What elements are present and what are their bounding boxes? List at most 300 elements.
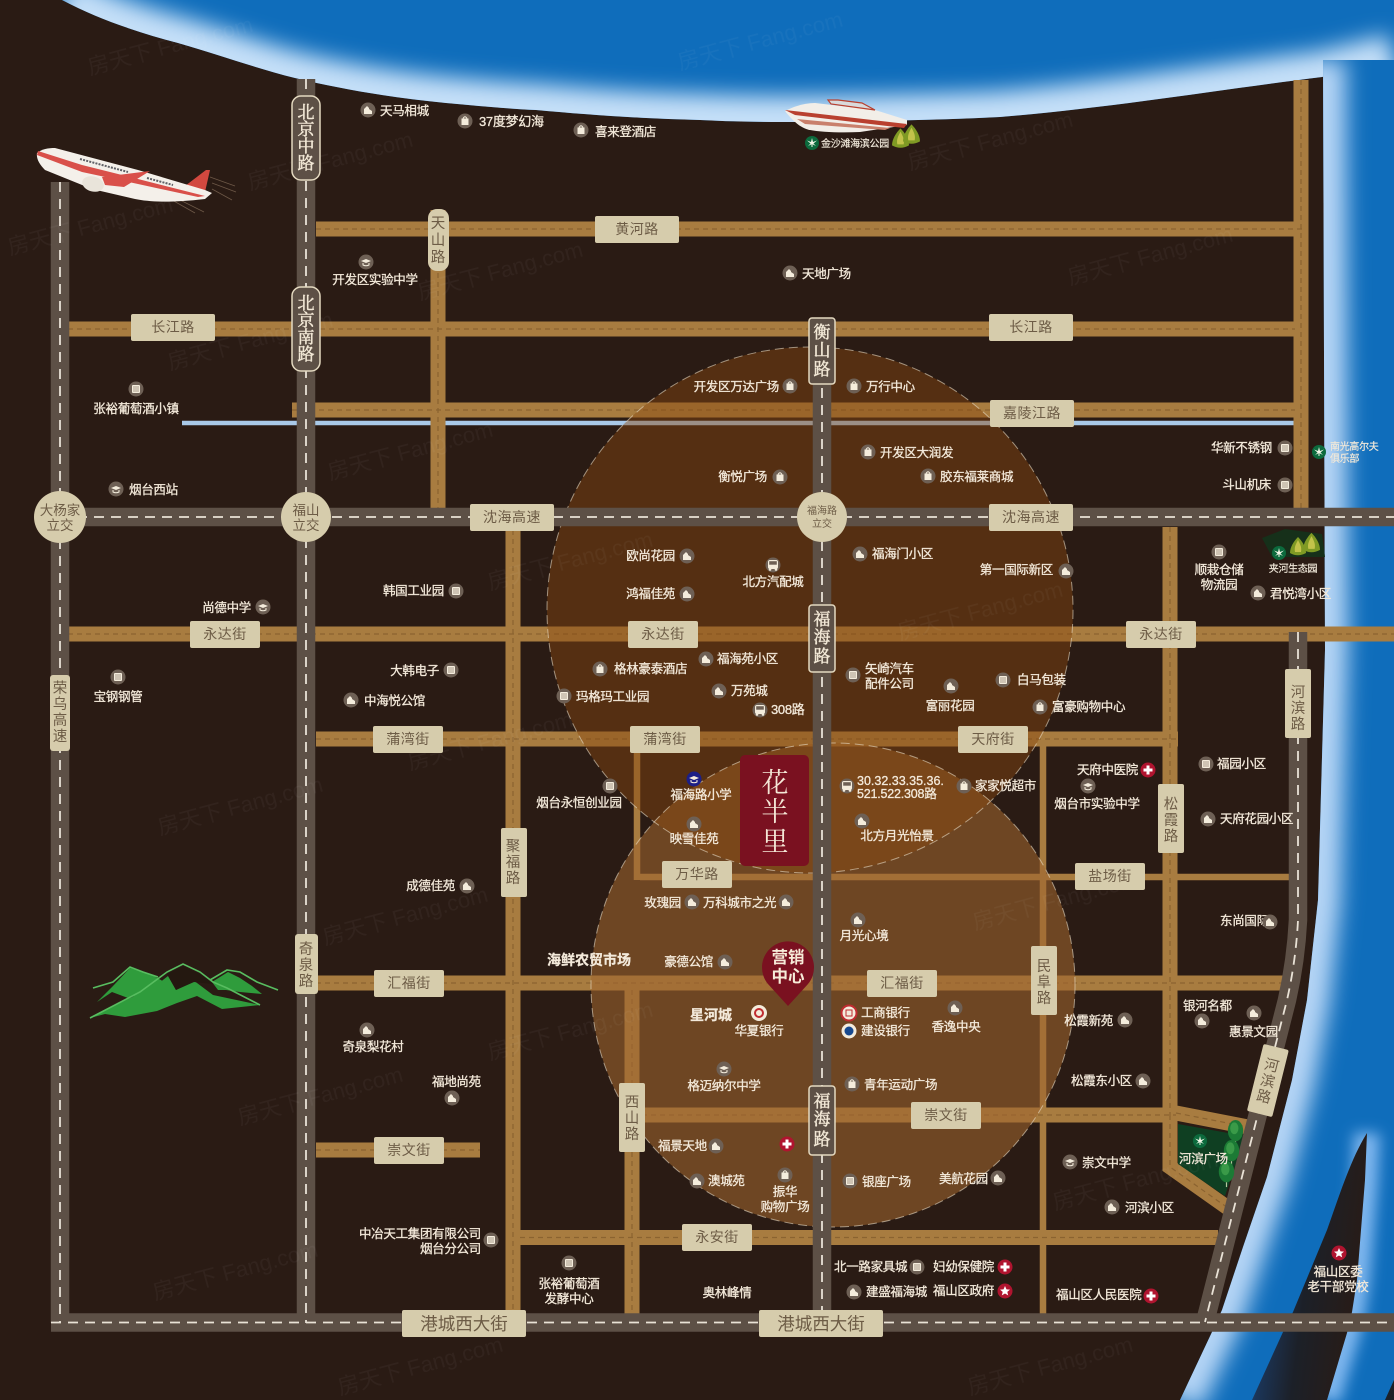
POI: 金沙滩海滨公园: 金沙滩海滨公园: [821, 137, 889, 150]
POI: 中冶天工集团: 中冶天工集团有限公司: [359, 1226, 481, 1241]
POI: 福海门小区: [852, 546, 933, 562]
POI: 天马相城: 天马相城: [380, 104, 430, 118]
road label: 嘉陵江路: [990, 400, 1074, 427]
POI: 天地广场: 天地广场: [802, 267, 851, 281]
road label: 福海路 north: [809, 605, 835, 672]
POI: 福山区人民医院: 福山区人民医院: [1056, 1287, 1142, 1302]
interchange: 福海路立交: 福海路: [807, 504, 837, 517]
POI: 北方汽配城: 北方汽配城: [742, 574, 804, 589]
POI: 开发区实验中学: [332, 254, 418, 287]
POI: 家家悦超市: [956, 778, 1036, 794]
road label: 蒲湾街 center: [630, 726, 700, 753]
road label: 河滨路 north: 路: [1291, 716, 1306, 733]
watermarks: 房天下 Fang.com: [405, 707, 575, 775]
road label: 荣乌高速: 荣: [53, 680, 67, 697]
watermarks: 房天下 Fang.com: [335, 1332, 505, 1400]
road label: 河滨路 north: 滨: [1291, 700, 1305, 717]
POI: 中冶天工集团: 烟台分公司: [420, 1241, 481, 1256]
POI: 河滨广场: [1179, 1134, 1228, 1166]
POI: 月光心境: 月光心境: [840, 928, 888, 943]
POI: 工商银行: 工商银行: [861, 1005, 910, 1020]
POI: 白马包装: 白马包装: [1017, 672, 1066, 687]
road label: 河滨路 south: 滨: [1259, 1071, 1277, 1091]
road label: 嘉陵江路: 嘉陵江路: [1003, 405, 1061, 421]
POI: 富丽花园: [926, 678, 974, 713]
top sea: [62, 0, 1394, 122]
road label: 福海路 north: 福: [814, 610, 830, 629]
POI: 福山区委老干部党校: 福山区委: [1314, 1264, 1363, 1279]
interchange: 福山立交: [281, 492, 331, 542]
POI: 矢崎汽车配件公司: [846, 661, 914, 691]
watermarks: 房天下 Fang.com: [965, 1332, 1135, 1400]
road label: 汇福街 east: 汇福街: [880, 975, 924, 991]
road label: 聚福路: 福: [506, 854, 520, 871]
road label: 北京南路: [292, 287, 320, 371]
road label: 福海路 south: 海: [814, 1110, 830, 1129]
road label: 长江路 east: 长江路: [1009, 319, 1053, 335]
POI: 福园小区: [1198, 756, 1266, 772]
POI: 医院 red cross: [780, 1136, 794, 1152]
sales center pin: [762, 941, 814, 1006]
POI: 烟台西站: 烟台西站: [129, 482, 178, 497]
road label: 永达街 east: 永达街: [1139, 626, 1183, 642]
project marker: 花半里: [740, 755, 809, 866]
interchange: 福山立交: 福山: [292, 503, 320, 518]
POI: 北方月光怡景: [854, 814, 934, 843]
icon: trees at riverside plaza: [1219, 1120, 1243, 1187]
project marker: 花半里: 半: [762, 797, 788, 827]
road label: 西山路: 山: [625, 1110, 639, 1127]
road label: 民阜路: 路: [1037, 990, 1052, 1007]
road label: 松霞路: 霞: [1164, 812, 1178, 829]
POI: 烟台市实验中学: [1054, 778, 1140, 811]
POI: 松霞新苑: 松霞新苑: [1064, 1013, 1114, 1028]
canal: [182, 421, 1295, 425]
POI: 张裕葡萄酒发酵中心: 张裕葡萄酒: [538, 1276, 600, 1291]
road label: 永达街 east: [1126, 621, 1196, 648]
watermarks: 房天下 Fang.com: [485, 527, 655, 595]
road label: 荣乌高速: 乌: [53, 696, 67, 713]
POI: 玫瑰园: 玫瑰园: [644, 895, 681, 910]
POI: 华新不锈钢: 华新不锈钢: [1211, 440, 1272, 455]
road label: 聚福路: 路: [506, 870, 521, 887]
watermarks: 房天下 Fang.com: [5, 192, 175, 260]
road label: 北京南路: 路: [298, 345, 314, 364]
interchange: 大杨家立交: [34, 491, 86, 543]
POI: 中冶天工集团: [359, 1226, 498, 1256]
POI: 华夏银行: [735, 1005, 783, 1038]
POI: 第一国际新区: 第一国际新区: [980, 562, 1053, 577]
road label: 福海路 south: 路: [814, 1130, 830, 1149]
POI: 37度梦幻海: 37度梦幻海: [479, 114, 544, 129]
road label: 永安街: [682, 1224, 752, 1251]
POI: 君悦湾小区: 君悦湾小区: [1270, 586, 1331, 601]
road label: 崇文街 east: 崇文街: [924, 1107, 968, 1123]
road label: 民阜路: 民: [1037, 959, 1051, 975]
road label: 奇泉路: 奇: [299, 941, 313, 958]
road label: 天府街: 天府街: [971, 731, 1015, 747]
POI: 308路: 308路: [771, 702, 805, 717]
road label: 长江路 west: [131, 314, 215, 341]
POI: 宝钢钢管: 宝钢钢管: [94, 689, 142, 704]
POI: 惠景文园: 惠景文园: [1229, 1024, 1278, 1039]
road label: 北京中路: [292, 96, 320, 180]
icon: trees at ecological park: [1262, 529, 1325, 557]
POI: 张裕葡萄酒发酵中心: 发酵中心: [545, 1291, 594, 1306]
river on the right: [1180, 60, 1394, 1400]
POI: 烟台永恒创业园: [536, 778, 622, 810]
POI: 尚德中学: 尚德中学: [202, 600, 251, 615]
POI: 福海苑小区: [698, 651, 778, 666]
road label: 沈海高速 east: [989, 504, 1073, 531]
POI: 南光高尔夫俱乐部: 俱乐部: [1330, 452, 1359, 465]
interchange: 大杨家立交: 大杨家: [40, 502, 81, 518]
POI: 成德佳苑: 成德佳苑: [406, 878, 456, 893]
POI: 振华购物广场: 振华: [773, 1184, 797, 1199]
POI: 银座广场: [842, 1174, 911, 1189]
POI: 松霞东小区: 松霞东小区: [1071, 1074, 1132, 1088]
road label: 福海路 south: [809, 1086, 835, 1155]
road label: 天山路: [428, 209, 449, 271]
POI: 北方月光怡景: 北方月光怡景: [860, 828, 934, 843]
POI: 建盛福海城: 建盛福海城: [866, 1284, 928, 1299]
road label: 聚福路: 聚: [506, 839, 521, 855]
road label: 松霞路: 松: [1164, 796, 1178, 813]
road label: 衡山路: 衡: [814, 323, 830, 342]
road label: 黄河路: 黄河路: [615, 221, 659, 237]
POI: 香逸中央: [932, 1000, 981, 1034]
POI: 福景天地: [658, 1138, 724, 1154]
POI: 第一国际新区: [980, 562, 1074, 578]
POI: 鸿福佳苑: [626, 586, 694, 602]
POI: 福山区政府: 福山区政府: [933, 1283, 994, 1298]
POI: 开发区实验中学: 开发区实验中学: [332, 272, 418, 287]
road label: 北京南路: 北: [298, 294, 314, 313]
POI: 福景天地: 福景天地: [658, 1138, 708, 1153]
watermarks: 房天下 Fang.com: [325, 417, 495, 485]
POI: 天地广场: [782, 266, 851, 281]
interchange: 福海路立交: 立交: [812, 517, 832, 530]
road label: 港城西大街 west: [402, 1310, 526, 1337]
POI: 银河名都: 银河名都: [1183, 998, 1233, 1013]
road label: 西山路: 路: [625, 1126, 640, 1143]
POI: 烟台西站: [108, 482, 178, 497]
road label: 汇福街 west: 汇福街: [387, 975, 431, 991]
road label: 北京中路: 北: [298, 103, 314, 122]
POI: 张裕葡萄酒小镇: 张裕葡萄酒小镇: [93, 401, 179, 416]
road label: 沈海高速 east: 沈海高速: [1002, 509, 1060, 525]
road label: 荣乌高速: 速: [53, 728, 67, 745]
POI: 公交线路: [840, 774, 944, 801]
POI: 顺栽仓储物流园: 顺栽仓储: [1195, 562, 1243, 577]
POI: 北一路家具城: 北一路家具城: [834, 1259, 908, 1274]
POI: 月光心境: [840, 912, 888, 943]
POI: 金沙滩海滨公园: [805, 136, 889, 150]
POI: 华夏银行: 华夏银行: [735, 1023, 783, 1038]
road label: 奇泉路: [295, 934, 318, 994]
road label: 奇泉路: 泉: [299, 957, 314, 974]
POI: 万苑城: 万苑城: [731, 684, 768, 698]
POI: 美航花园: 美航花园: [939, 1171, 988, 1186]
POI: 映雪佳苑: 映雪佳苑: [670, 832, 719, 846]
POI: 万苑城: [712, 684, 768, 698]
road label: 衡山路: 山: [814, 341, 830, 360]
road label: 民阜路: [1031, 946, 1057, 1015]
POI: 振华购物广场: 购物广场: [761, 1199, 809, 1214]
POI: 成德佳苑: [406, 878, 474, 894]
road label: 永达街 west: 永达街: [203, 626, 247, 642]
POI: 308路: [752, 702, 805, 718]
POI: 喜来登酒店: 喜来登酒店: [595, 124, 656, 139]
POI: 万科城市之光: 万科城市之光: [703, 895, 776, 910]
road label: 沈海高速 west: 沈海高速: [483, 509, 541, 525]
POI: 格迈纳尔中学: [687, 1062, 761, 1093]
road label: 西山路: 西: [625, 1095, 639, 1111]
POI: 东尚国际: 东尚国际: [1220, 914, 1269, 928]
POI: 韩国工业园: [383, 583, 464, 598]
POI: 欧尚花园: 欧尚花园: [626, 548, 675, 563]
road label: 蒲湾街 center: 蒲湾街: [643, 731, 687, 747]
icon: trees at beach park: [892, 124, 920, 148]
road label: 永达街 center: 永达街: [641, 626, 685, 642]
POI: 宝钢钢管: [94, 670, 142, 704]
POI: 鸿福佳苑: 鸿福佳苑: [626, 586, 676, 601]
POI: 格林豪泰酒店: [592, 661, 687, 676]
POI: 喜来登酒店: [574, 122, 656, 139]
POI: 欧尚花园: [626, 548, 694, 564]
road label: 长江路 west: 长江路: [151, 319, 195, 335]
road label: 天山路: 路: [431, 249, 446, 266]
POI: 福山区政府: [933, 1283, 1012, 1298]
POI: 夹河生态园: 夹河生态园: [1269, 562, 1318, 575]
watermarks: 房天下 Fang.com: [905, 107, 1075, 175]
watermarks: 房天下 Fang.com: [150, 1237, 320, 1305]
road label: 港城西大街 east: [759, 1310, 883, 1337]
POI: 格迈纳尔中学: 格迈纳尔中学: [687, 1078, 761, 1093]
POI: 君悦湾小区: [1250, 586, 1331, 601]
POI: 万行中心: [846, 378, 916, 394]
road label: 衡山路: [809, 318, 835, 384]
road label: 港城西大街 east: 港城西大街: [777, 1314, 865, 1334]
POI: 天马相城: [360, 102, 430, 118]
road label: 永达街 center: [628, 621, 698, 648]
POI: 张裕葡萄酒小镇: [93, 382, 179, 416]
POI: 建设银行: [842, 1023, 910, 1038]
road label: 聚福路: [501, 828, 527, 897]
POI: 福地尚苑: [432, 1074, 482, 1106]
icon: mountains: [90, 964, 278, 1018]
sales center pin: 营销: [772, 948, 804, 967]
road label: 蒲湾街 west: [373, 726, 443, 753]
sales center pin: 中心: [772, 967, 805, 986]
watermarks: 房天下 Fang.com: [320, 882, 490, 950]
POI: 振华购物广场: [761, 1168, 809, 1214]
POI: 公交线路: 521.522.308路: [857, 786, 937, 801]
POI: 福海门小区: 福海门小区: [872, 546, 933, 561]
interchange: 大杨家立交: 立交: [46, 517, 74, 533]
POI: 尚德中学: [202, 600, 270, 615]
POI: 格林豪泰酒店: 格林豪泰酒店: [614, 661, 687, 676]
road label: 盐场街: 盐场街: [1088, 868, 1132, 884]
road label: 西山路: [619, 1083, 645, 1152]
POI: 斗山机床: 斗山机床: [1222, 478, 1272, 492]
watermarks: 房天下 Fang.com: [485, 997, 655, 1065]
interchange: 福山立交: 立交: [292, 517, 320, 533]
watermarks: 房天下 Fang.com: [1050, 1147, 1220, 1215]
road label: 港城西大街 west: 港城西大街: [420, 1314, 508, 1334]
road label: 河滨路 south: 路: [1255, 1087, 1273, 1107]
watermarks: 房天下 Fang.com: [415, 237, 585, 305]
icon: airplane: [37, 148, 236, 213]
service radius circles: [547, 347, 1075, 1227]
road label: 衡山路: 路: [814, 360, 830, 379]
POI: 香逸中央: 香逸中央: [932, 1019, 981, 1034]
project marker: 花半里: 里: [762, 827, 788, 857]
POI: 开发区万达广场: 开发区万达广场: [694, 379, 779, 394]
POI: 豪德公馆: [664, 954, 732, 970]
road label: 北京中路: 中: [298, 137, 314, 156]
POI: 天府花园小区: 天府花园小区: [1220, 811, 1293, 826]
POI: 妇幼保健院: 妇幼保健院: [933, 1260, 995, 1274]
POI: 矢崎汽车配件公司: 配件公司: [865, 677, 914, 691]
POI: 工商银行: [842, 1005, 910, 1020]
POI: 建设银行: 建设银行: [861, 1023, 910, 1038]
road label: 天山路: 天: [431, 216, 445, 232]
POI: 家家悦超市: 家家悦超市: [975, 778, 1036, 793]
POI: 烟台市实验中学: 烟台市实验中学: [1054, 796, 1140, 811]
road label: 黄河路: [595, 216, 679, 243]
POI: 福山区委老干部党校: 老干部党校: [1307, 1279, 1369, 1294]
POI: 崇文中学: 崇文中学: [1082, 1155, 1131, 1170]
POI: 青年运动广场: 青年运动广场: [864, 1078, 937, 1092]
POI: 福山区委老干部党校: [1307, 1246, 1369, 1294]
POI: 河滨广场: 河滨广场: [1179, 1151, 1228, 1166]
road label: 河滨路 south: [1247, 1044, 1289, 1117]
POI: 衡悦广场: [718, 470, 788, 484]
road label: 民阜路: 阜: [1037, 974, 1051, 991]
road label: 松霞路: [1158, 784, 1184, 853]
road label: 北京中路: 路: [298, 154, 314, 173]
POI: 斗山机床: [1222, 478, 1292, 492]
POI: 夹河生态园: [1269, 546, 1318, 575]
POI: 银座广场: 银座广场: [862, 1174, 911, 1189]
road label: 盐场街: [1075, 863, 1145, 890]
POI: 奇泉梨花村: 奇泉梨花村: [342, 1039, 404, 1054]
POI: 福海苑小区: 福海苑小区: [717, 651, 778, 666]
icon: speedboat: [785, 100, 907, 132]
POI: 豪德公馆: 豪德公馆: [664, 954, 713, 969]
interchange: 福海路立交: [797, 492, 847, 542]
road label: 河滨路 north: 河: [1291, 684, 1305, 701]
road label: 北京南路: 南: [298, 328, 314, 347]
POI: 惠景文园: [1229, 1006, 1278, 1039]
POI: 中海悦公馆: 中海悦公馆: [364, 693, 425, 708]
POI: 韩国工业园: 韩国工业园: [383, 583, 444, 598]
POI: 白马包装: [996, 672, 1066, 688]
road label: 河滨路 south: 河: [1262, 1056, 1281, 1076]
POI: 开发区大润发: 开发区大润发: [880, 445, 954, 460]
road label: 崇文街 west: [374, 1137, 444, 1164]
POI: 大韩电子: [390, 662, 458, 678]
POI: 万行中心: 万行中心: [866, 379, 916, 394]
POI: 美航花园: [939, 1170, 1006, 1186]
POI: 富丽花园: 富丽花园: [926, 698, 974, 713]
road label: 北京中路: 京: [298, 120, 314, 139]
POI: 中海悦公馆: [344, 692, 425, 708]
POI: 顺栽仓储物流园: [1195, 544, 1243, 592]
POI: 南光高尔夫俱乐部: [1312, 440, 1379, 465]
watermarks: 房天下 Fang.com: [85, 12, 255, 80]
road label: 天府街: [958, 726, 1028, 753]
watermarks: 房天下 Fang.com: [245, 127, 415, 195]
POI: 衡悦广场: 衡悦广场: [718, 470, 767, 484]
road label: 万华路: [662, 861, 732, 888]
POI: 烟台永恒创业园: 烟台永恒创业园: [536, 795, 622, 810]
road label: 永安街: 永安街: [695, 1229, 739, 1245]
POI: 华新不锈钢: [1211, 440, 1292, 456]
POI: 福海路小学: [670, 772, 732, 802]
POI: 奇泉梨花村: [342, 1022, 404, 1054]
watermarks: 房天下 Fang.com: [1065, 222, 1235, 290]
POI: 南光高尔夫俱乐部: 南光高尔夫: [1330, 440, 1379, 453]
road label: 河滨路 north: [1285, 669, 1311, 738]
POI: 松霞新苑: [1064, 1012, 1132, 1028]
POI: 映雪佳苑: [670, 816, 719, 846]
POI: 公交线路: 30.32.33.35.36.: [857, 774, 944, 788]
road label: 天山路: 山: [431, 232, 445, 249]
road label: 汇福街 west: [374, 970, 444, 997]
POI: 顺栽仓储物流园: 物流园: [1201, 578, 1237, 592]
POI: 大韩电子: 大韩电子: [390, 663, 439, 678]
road label: 万华路: 万华路: [675, 866, 719, 882]
watermarks: 房天下 Fang.com: [155, 772, 325, 840]
road label: 北京南路: 京: [298, 311, 314, 330]
road label: 福海路 north: 海: [814, 628, 830, 647]
watermarks: 房天下 Fang.com: [895, 577, 1065, 645]
POI: 玛格玛工业园: 玛格玛工业园: [576, 689, 649, 704]
POI: 河滨小区: [1104, 1200, 1174, 1215]
POI: 富豪购物中心: 富豪购物中心: [1052, 699, 1126, 714]
green plaza: [1178, 1124, 1245, 1196]
POI: 星河城: 星河城: [690, 1007, 732, 1023]
road label: 福海路 north: 路: [814, 647, 830, 666]
POI: 澳城苑: 澳城苑: [708, 1174, 745, 1188]
POI: 奥林峰情: 奥林峰情: [703, 1286, 751, 1300]
watermarks: 房天下 Fang.com: [970, 867, 1140, 935]
POI: 胶东福莱商城: 胶东福莱商城: [940, 469, 1014, 484]
road label: 永达街 west: [190, 621, 260, 648]
POI: 矢崎汽车配件公司: 矢崎汽车: [865, 661, 914, 676]
road label: 奇泉路: 路: [299, 973, 314, 990]
POI: 河滨小区: 河滨小区: [1125, 1200, 1174, 1215]
POI: 福海路小学: 福海路小学: [670, 787, 732, 802]
road label: 汇福街 east: [867, 970, 937, 997]
POI: 北方汽配城: [742, 558, 804, 589]
POI: 崇文中学: [1062, 1154, 1131, 1170]
POI: 银河名都: [1183, 998, 1233, 1028]
road label: 长江路 east: [989, 314, 1073, 341]
road label: 蒲湾街 west: 蒲湾街: [386, 731, 430, 747]
watermarks: 房天下 Fang.com: [165, 307, 335, 375]
POI: 建盛福海城: [846, 1284, 928, 1300]
POI: 澳城苑: [690, 1174, 745, 1188]
POI: 玫瑰园: [644, 894, 700, 910]
POI: 海鲜农贸市场: 海鲜农贸市场: [547, 952, 631, 968]
road label: 沈海高速 west: [470, 504, 554, 531]
road label: 福海路 south: 福: [814, 1092, 830, 1111]
road label: 崇文街 east: [911, 1102, 981, 1129]
road label: 松霞路: 路: [1164, 828, 1179, 845]
